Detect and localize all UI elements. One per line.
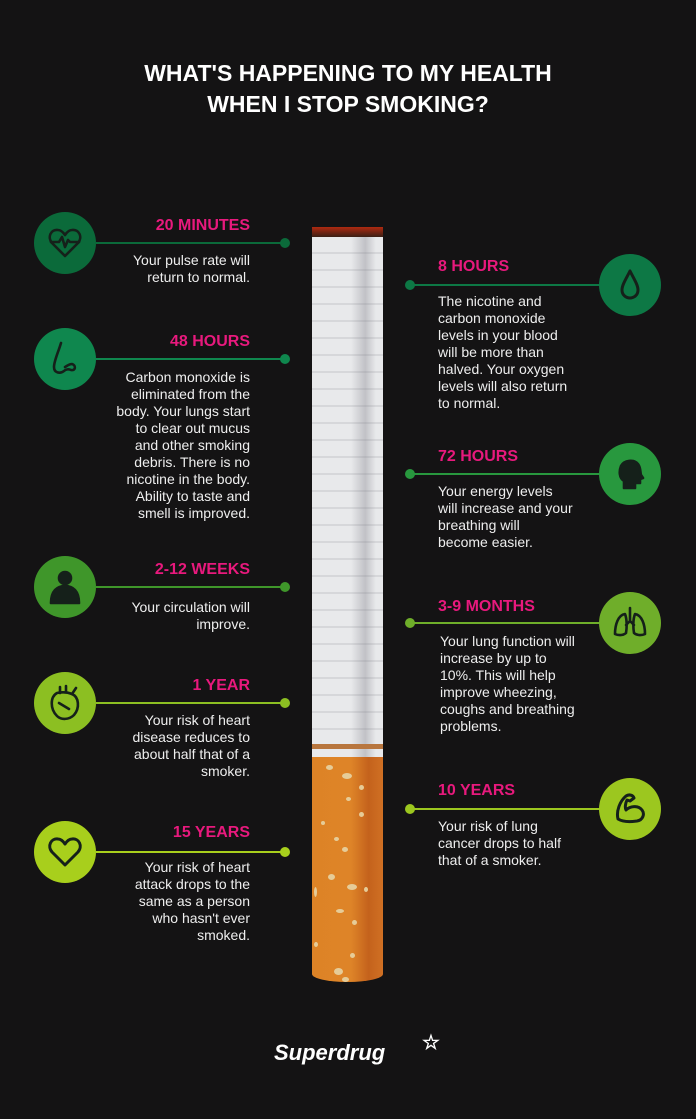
item: 10 years: cancer drops to half (438, 835, 561, 851)
item: 1 year: about half that of a (134, 746, 250, 762)
item: 15 years: who hasn't ever (152, 910, 250, 926)
item: 15 years: 15 YEARS (173, 824, 250, 841)
item: 3-9 months: improve wheezing, (440, 684, 557, 700)
item: 8 hours: carbon monoxide (438, 310, 545, 326)
icon: body (34, 556, 96, 618)
item: 10 years: that of a smoker. (438, 852, 542, 868)
item: 15 years: same as a person (139, 893, 250, 909)
item: 20 minutes: Your pulse rate will (133, 252, 250, 268)
item: 2-12 weeks: Your circulation will (131, 599, 250, 615)
item: 3-9 months: Your lung function will (440, 633, 575, 649)
item: 48 hours: 48 HOURS (170, 333, 250, 350)
item: 48 hours (34, 328, 290, 521)
icon: heart pulse (34, 212, 96, 274)
item: 48 hours: eliminated from the (131, 386, 250, 402)
item: 3-9 months: coughs and breathing (440, 701, 575, 717)
item: 48 hours: body. Your lungs start (116, 403, 250, 419)
item: 3-9 months: problems. (440, 718, 501, 734)
item: 15 years: attack drops to the (135, 876, 250, 892)
item: 15 years (34, 821, 290, 943)
icon: lungs (599, 592, 661, 654)
icon: anatomical heart (34, 672, 96, 734)
item: 15 years: Your risk of heart (145, 859, 250, 875)
item: 72 hours: will increase and your (438, 500, 573, 516)
item: 8 hours (405, 254, 661, 411)
item: 1 year (34, 672, 290, 779)
item: 8 hours: will be more than (438, 344, 544, 360)
item: 8 hours: levels will also return (438, 378, 567, 394)
icon: heart (34, 821, 96, 883)
logo: Superdrug (274, 1032, 440, 1065)
item: 48 hours: debris. There is no (134, 454, 250, 470)
item: 20 minutes: 20 MINUTES (156, 217, 250, 234)
item: 8 hours: 8 HOURS (438, 258, 509, 275)
item: 20 minutes (34, 212, 290, 285)
item: 1 year: disease reduces to (132, 729, 250, 745)
logo: Superdrug: ☆ (422, 1032, 440, 1054)
item: 48 hours: and other smoking (135, 437, 250, 453)
icon: head (599, 443, 661, 505)
title: WHAT'S HAPPENING TO MY HEALTH (144, 60, 552, 86)
item: 20 minutes: return to normal. (147, 269, 250, 285)
item: 10 years (405, 778, 661, 868)
item: 72 hours (405, 443, 661, 550)
item: 8 hours: The nicotine and (438, 293, 542, 309)
item: 2-12 weeks: improve. (196, 616, 250, 632)
item: 8 hours: halved. Your oxygen (438, 361, 564, 377)
item: 48 hours: to clear out mucus (136, 420, 250, 436)
title: WHEN I STOP SMOKING? (207, 91, 489, 117)
item: 8 hours: to normal. (438, 395, 500, 411)
logo: Superdrug: Superdrug (274, 1040, 385, 1065)
item: 48 hours: Carbon monoxide is (125, 369, 250, 385)
icon: nose (34, 328, 96, 390)
item: 3-9 months: 10%. This will help (440, 667, 556, 683)
title (144, 60, 552, 117)
item: 2-12 weeks (34, 556, 290, 632)
cigarette (312, 227, 383, 982)
icon: drop (599, 254, 661, 316)
item: 72 hours: become easier. (438, 534, 533, 550)
item: 72 hours: breathing will (438, 517, 520, 533)
item: 48 hours: smell is improved. (138, 505, 250, 521)
item: 10 years: Your risk of lung (438, 818, 538, 834)
item: 1 year: Your risk of heart (145, 712, 250, 728)
item: 3-9 months: 3-9 MONTHS (438, 598, 535, 615)
icon: muscle arm (599, 778, 661, 840)
item: 10 years: 10 YEARS (438, 782, 515, 799)
item: 72 hours: 72 HOURS (438, 448, 518, 465)
item: 48 hours: nicotine in the body. (126, 471, 250, 487)
item: 2-12 weeks: 2-12 WEEKS (155, 561, 250, 578)
item: 3-9 months (405, 592, 661, 734)
item: 8 hours: levels in your blood (438, 327, 558, 343)
item: 3-9 months: increase by up to (440, 650, 547, 666)
item: 72 hours: Your energy levels (438, 483, 553, 499)
item: 1 year: 1 YEAR (192, 677, 250, 694)
item: 1 year: smoker. (201, 763, 250, 779)
item: 48 hours: Ability to taste and (136, 488, 250, 504)
item: 15 years: smoked. (197, 927, 250, 943)
